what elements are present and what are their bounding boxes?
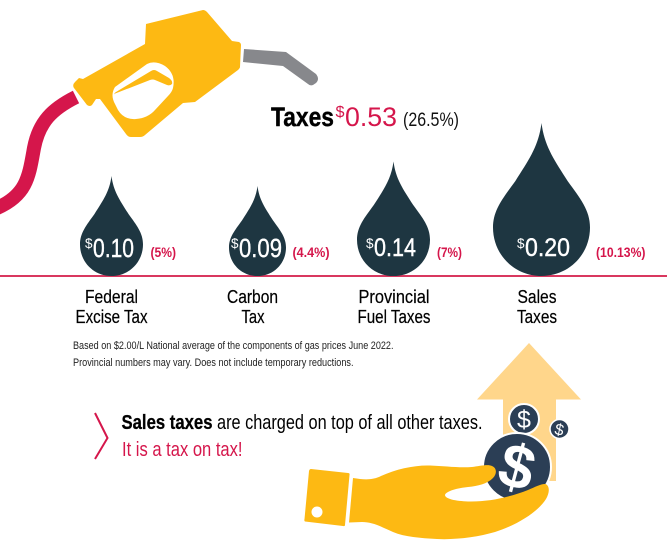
label: federal excise tax: Federal [85,287,138,307]
drop: federal excise tax: (5%) [150,244,176,260]
drop: federal excise tax: $ [85,235,93,251]
label: federal excise tax [76,287,148,327]
title [271,102,459,132]
icon: tiny coin [550,420,569,440]
drop: carbon tax [229,186,330,276]
title: 0.53 [345,102,397,132]
title: (26.5%) [403,110,459,131]
footnote: Based on $2.00/L National average of the components of gas prices June 2022. [73,340,394,352]
label: carbon tax [227,287,278,327]
baseline rule [0,275,667,277]
callout text: Sales taxes [122,412,212,434]
drop: provincial fuel taxes [357,162,462,276]
label: provincial fuel taxes: Fuel Taxes [358,307,430,327]
drop: provincial fuel taxes: $ [366,235,374,251]
spout [243,49,318,85]
label: provincial fuel taxes [358,287,430,327]
icon: tiny coin: $ [553,421,565,440]
drop: provincial fuel taxes: (7%) [437,244,462,260]
label: carbon tax: Tax [242,307,264,327]
label: sales taxes: Taxes [517,307,557,327]
icon: large coin: $ [491,430,542,505]
nozzle trigger [114,70,172,95]
cuff [304,469,350,526]
label: sales taxes [517,287,557,327]
drop: carbon tax: (4.4%) [292,244,330,260]
callout text: It is a tax on tax! [122,439,242,461]
label: carbon tax: Carbon [227,287,278,307]
drop: carbon tax: $ [231,235,239,251]
drop: sales taxes: 0.20 [525,234,570,262]
drop: federal excise tax: 0.10 [93,233,134,263]
drop: provincial fuel taxes: 0.14 [374,234,416,262]
drop: sales taxes: $ [517,235,525,251]
drop: sales taxes [493,123,646,276]
icon: small coin: $ [517,406,531,434]
drop: carbon tax: 0.09 [239,233,282,263]
drop: sales taxes: (10.13%) [596,244,646,260]
title: $ [336,104,345,121]
nozzle body [73,10,241,137]
label: sales taxes: Sales [518,287,556,307]
drop: federal excise tax [80,176,176,276]
label: provincial fuel taxes: Provincial [358,287,430,307]
footnote: Provincial numbers may vary. Does not include temporary reductions. [73,357,354,369]
hose [0,97,76,208]
hand shape [349,465,549,539]
footnote [73,340,394,369]
callout text [122,412,482,461]
icon: chevron [95,413,108,459]
label: federal excise tax: Excise Tax [76,307,148,327]
icon: up arrow [477,343,581,481]
callout text: are charged on top of all other taxes. [217,412,482,434]
title: Taxes [271,102,334,132]
icon: fuel pump nozzle and hose [0,10,318,208]
icon: small coin [509,404,539,434]
icon: hand [304,465,549,539]
